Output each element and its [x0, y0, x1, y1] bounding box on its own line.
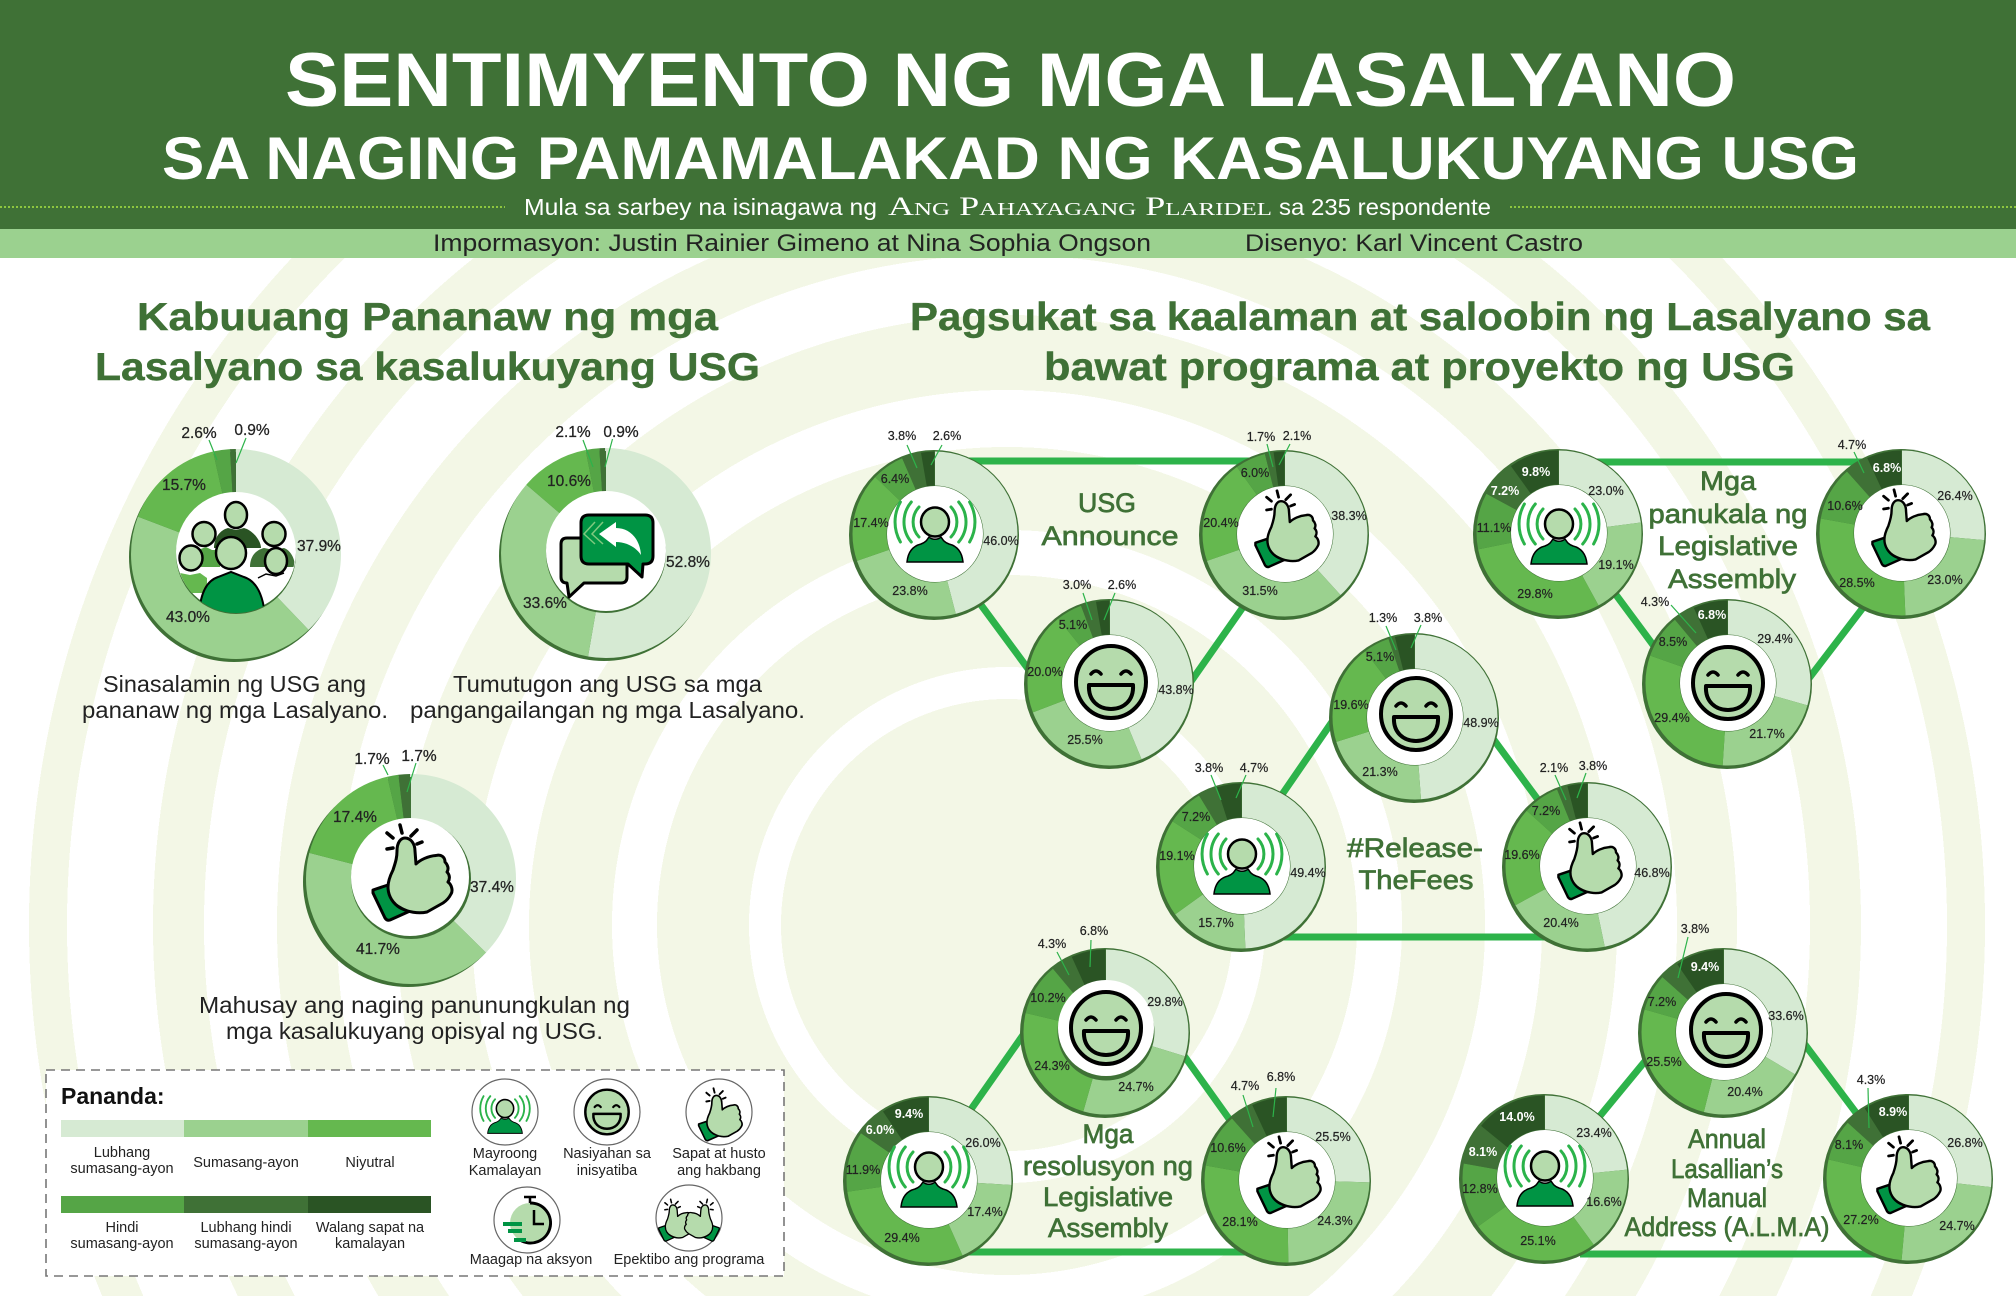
caption: Mahusay — [199, 992, 630, 1044]
donut: resolusyon satisfied: 24.7% — [1118, 1080, 1154, 1094]
label: Release the Fees — [1347, 833, 1483, 895]
label: resolusyon: Assembly — [1048, 1213, 1169, 1243]
donut: panukala satisfied: 29.4% — [1757, 632, 1793, 646]
label: panukala: Legislative — [1658, 531, 1798, 561]
donut: resolusyon satisfied: 29.8% — [1147, 995, 1183, 1009]
icon: thumb — [1255, 491, 1319, 567]
donut: USG Announce awareness: 2.6% — [933, 429, 961, 443]
icon: person — [1519, 504, 1599, 564]
legend colour labels: Sumasang-ayon — [193, 1155, 299, 1171]
icon: thumb — [1877, 1137, 1941, 1213]
legend colour labels: Lubhang — [94, 1145, 150, 1161]
legend panel: Pananda: — [61, 1083, 165, 1109]
donut: resolusyon satisfied: 24.3% — [1034, 1059, 1070, 1073]
heading: right — [910, 296, 1930, 389]
heading: right: bawat programa at proyekto ng USG — [1044, 346, 1795, 389]
donut: ALMA sufficient: 24.7% — [1939, 1219, 1975, 1233]
donut: Release the Fees sufficient — [1502, 759, 1672, 952]
connector triangle: resolusyon — [960, 1018, 1260, 1252]
donut: resolusyon satisfied — [1020, 924, 1190, 1118]
donut: panukala satisfied: 6.8% — [1698, 608, 1726, 622]
icon: smile — [1693, 647, 1763, 719]
legend colour labels — [70, 1145, 425, 1252]
donut: Release the Fees satisfied: 3.8% — [1414, 611, 1442, 625]
label: resolusyon: resolusyon ng — [1023, 1151, 1193, 1181]
connector triangle: USG Announce — [960, 461, 1260, 690]
donut: panukala awareness: 7.2% — [1491, 484, 1519, 498]
legend icon: awareness — [469, 1079, 541, 1179]
donut: resolusyon satisfied: 4.3% — [1038, 937, 1066, 951]
label: panukala: Assembly — [1668, 564, 1797, 594]
donut: ALMA satisfied: 20.4% — [1727, 1085, 1763, 1099]
donut: Release the Fees sufficient: 20.4% — [1543, 916, 1579, 930]
donut: ALMA awareness: 23.4% — [1576, 1126, 1612, 1140]
connector triangle: ALMA — [1580, 1034, 1880, 1254]
donut: Release the Fees sufficient: 19.6% — [1504, 848, 1540, 862]
donut: resolusyon awareness: 17.4% — [967, 1205, 1003, 1219]
caption: Mahusay: Mahusay ang naging panunungkulan ng — [199, 992, 630, 1018]
donut: panukala sufficient: 4.7% — [1838, 438, 1866, 452]
icon: thumb — [1872, 490, 1936, 566]
donut: ALMA awareness: 25.1% — [1520, 1234, 1556, 1248]
donut: ALMA sufficient: 8.9% — [1879, 1105, 1907, 1119]
donut: panukala sufficient: 28.5% — [1839, 576, 1875, 590]
legend icon: sufficient: Sapat at husto — [672, 1146, 766, 1162]
legend colour bars — [61, 1120, 431, 1213]
donut: ALMA awareness: 14.0% — [1499, 1110, 1535, 1124]
donut: USG Announce awareness — [849, 429, 1019, 620]
donut: Sinasalamin ng USG — [129, 422, 341, 662]
donut: ALMA awareness: 12.8% — [1462, 1182, 1498, 1196]
donut: resolusyon awareness: 29.4% — [884, 1231, 920, 1245]
donut: resolusyon sufficient: 4.7% — [1231, 1079, 1259, 1093]
donut: ALMA awareness: 8.1% — [1469, 1145, 1497, 1159]
donut: ALMA awareness — [1459, 1094, 1629, 1264]
caption: Sinasalamin: pananaw ng mga Lasalyano. — [82, 697, 388, 723]
donut: ALMA sufficient: 26.8% — [1947, 1136, 1983, 1150]
donut: USG Announce sufficient: 38.3% — [1331, 509, 1367, 523]
donut: USG Announce satisfied: 25.5% — [1067, 733, 1103, 747]
donut: panukala satisfied: 29.4% — [1654, 711, 1690, 725]
donut: panukala awareness: 11.1% — [1477, 521, 1511, 535]
donut: panukala satisfied: 4.3% — [1641, 595, 1669, 609]
donut: Mahusay ang panunungkulan: 37.4% — [470, 879, 514, 896]
donut: resolusyon awareness: 9.4% — [895, 1107, 923, 1121]
title: SA NAGING PAMAMALAKAD NG KASALUKUYANG USG — [162, 125, 1859, 192]
donut: panukala satisfied — [1641, 595, 1812, 769]
subtitle line: Ang Pahayagang Plaridel — [888, 192, 1272, 221]
credits: Impormasyon: Justin Rainier Gimeno at Nina Sophia Ongson — [433, 230, 1151, 257]
legend colour labels: Niyutral — [345, 1155, 395, 1171]
donut: Mahusay ang panunungkulan — [303, 748, 514, 987]
donut: panukala sufficient: 26.4% — [1937, 489, 1973, 503]
legend icon: timely — [470, 1187, 592, 1268]
donut: ALMA sufficient: 4.3% — [1857, 1073, 1885, 1087]
donut: USG Announce awareness: 23.8% — [892, 584, 928, 598]
label: resolusyon — [1023, 1119, 1193, 1243]
donut: ALMA sufficient — [1823, 1073, 1993, 1264]
donut: ALMA awareness: 16.6% — [1586, 1195, 1622, 1209]
donut: Sinasalamin ng USG: 37.9% — [297, 538, 341, 555]
caption: Sinasalamin — [82, 671, 388, 723]
donut: Release the Fees awareness: 7.2% — [1182, 810, 1210, 824]
donut: USG Announce satisfied: 2.6% — [1108, 578, 1136, 592]
donut: ALMA satisfied: 25.5% — [1646, 1055, 1682, 1069]
legend colour labels: sumasang-ayon — [70, 1161, 174, 1177]
donut: resolusyon sufficient: 24.3% — [1317, 1214, 1353, 1228]
legend panel — [46, 1070, 784, 1276]
donut: USG Announce sufficient: 20.4% — [1203, 516, 1239, 530]
donut: ALMA sufficient: 27.2% — [1843, 1213, 1879, 1227]
legend icon: effective: Epektibo ang programa — [614, 1252, 765, 1268]
donut: USG Announce satisfied: 5.1% — [1059, 618, 1087, 632]
donut: resolusyon awareness: 26.0% — [965, 1136, 1001, 1150]
donut: USG Announce awareness: 17.4% — [853, 516, 889, 530]
donut: Release the Fees awareness: 19.1% — [1159, 849, 1195, 863]
donut: Release the Fees sufficient: 46.8% — [1634, 866, 1670, 880]
donut: USG Announce awareness: 46.0% — [983, 534, 1019, 548]
legend icon: awareness: Kamalayan — [469, 1163, 541, 1179]
icon: smile — [1071, 992, 1141, 1064]
icon: smile — [1381, 678, 1451, 750]
donut: Mahusay ang panunungkulan: 1.7% — [401, 748, 437, 765]
donut: resolusyon awareness — [843, 1096, 1013, 1266]
subtitle line — [0, 192, 2016, 221]
donut: Sinasalamin ng USG: 0.9% — [234, 422, 270, 439]
caption: Tumutugon — [410, 671, 805, 723]
label: resolusyon: Legislative — [1043, 1182, 1173, 1212]
icon: smile — [1076, 646, 1146, 718]
icon: crowd — [180, 502, 295, 616]
donut: resolusyon sufficient: 28.1% — [1222, 1215, 1258, 1229]
donut: USG Announce sufficient: 31.5% — [1242, 584, 1278, 598]
donut: Tumutugon ang USG: 0.9% — [603, 424, 639, 441]
donut: Tumutugon ang USG — [499, 424, 710, 661]
title — [162, 38, 1859, 192]
donut: Release the Fees awareness: 4.7% — [1240, 761, 1268, 775]
donut: USG Announce sufficient: 2.1% — [1283, 429, 1311, 443]
donut: Mahusay ang panunungkulan: 41.7% — [356, 941, 400, 958]
connector triangle: Release the Fees — [1270, 703, 1560, 937]
credits — [433, 230, 1583, 257]
donut: Release the Fees satisfied: 1.3% — [1369, 611, 1397, 625]
donut: ALMA satisfied — [1638, 922, 1808, 1118]
label: ALMA — [1624, 1124, 1830, 1242]
legend icon: sufficient: ang hakbang — [677, 1163, 761, 1179]
caption: Sinasalamin: Sinasalamin ng USG ang — [103, 671, 366, 697]
label: resolusyon: Mga — [1082, 1119, 1134, 1149]
donut: resolusyon sufficient — [1201, 1070, 1371, 1266]
legend icon: satisfied: inisyatiba — [577, 1163, 638, 1179]
donut: ALMA satisfied: 9.4% — [1691, 960, 1719, 974]
donut: Release the Fees awareness: 49.4% — [1290, 866, 1326, 880]
donut: panukala sufficient: 23.0% — [1927, 573, 1963, 587]
label: USG Announce: Announce — [1042, 521, 1178, 551]
donut: USG Announce sufficient — [1199, 429, 1369, 620]
donut: Release the Fees satisfied: 19.6% — [1333, 698, 1369, 712]
caption: Tumutugon: pangangailangan ng mga Lasalyano. — [410, 697, 805, 723]
donut: Release the Fees sufficient: 2.1% — [1540, 761, 1568, 775]
label: USG Announce — [1042, 488, 1178, 551]
donut: Release the Fees satisfied — [1329, 611, 1499, 803]
donut: Mahusay ang panunungkulan: 17.4% — [333, 809, 377, 826]
legend colour labels: kamalayan — [335, 1236, 405, 1252]
label: panukala — [1648, 466, 1808, 594]
label: panukala: Mga — [1700, 466, 1757, 496]
legend colour labels: Hindi — [105, 1220, 139, 1236]
label: ALMA: Manual — [1687, 1183, 1767, 1213]
donut: resolusyon awareness: 11.9% — [846, 1163, 880, 1177]
donut: resolusyon sufficient: 10.6% — [1210, 1141, 1246, 1155]
donut: panukala satisfied: 8.5% — [1659, 635, 1687, 649]
caption: Mahusay: mga kasalukuyang opisyal ng USG. — [226, 1018, 603, 1044]
donut: panukala sufficient — [1816, 438, 1986, 619]
label: ALMA: Address (A.L.M.A) — [1624, 1212, 1830, 1242]
legend icon: awareness: Mayroong — [473, 1146, 537, 1162]
legend colour labels: sumasang-ayon — [194, 1236, 298, 1252]
caption: Tumutugon: Tumutugon ang USG sa mga — [453, 671, 762, 697]
icon: person — [1202, 834, 1282, 894]
donut: resolusyon sufficient: 6.8% — [1267, 1070, 1295, 1084]
subtitle line: Mula sa sarbey na isinagawa ng — [524, 194, 877, 220]
donut: panukala awareness — [1473, 449, 1643, 619]
icon: chat bubbles — [561, 515, 653, 597]
label: ALMA: Annual — [1688, 1124, 1766, 1154]
donut: resolusyon awareness: 6.0% — [866, 1123, 894, 1137]
label: Release the Fees: #Release- — [1347, 833, 1483, 863]
donut: panukala awareness: 9.8% — [1522, 465, 1550, 479]
donut: resolusyon satisfied: 10.2% — [1030, 991, 1066, 1005]
donut: Sinasalamin ng USG: 43.0% — [166, 609, 210, 626]
donut: resolusyon satisfied: 6.8% — [1080, 924, 1108, 938]
donut: USG Announce satisfied — [1024, 578, 1194, 769]
donut: panukala sufficient: 10.6% — [1827, 499, 1863, 513]
legend icon: satisfied — [563, 1079, 652, 1179]
label: USG Announce: USG — [1078, 488, 1136, 518]
donut: panukala awareness: 29.8% — [1517, 587, 1553, 601]
donut: Tumutugon ang USG: 33.6% — [523, 595, 567, 612]
donut: panukala awareness: 19.1% — [1598, 558, 1634, 572]
label: ALMA: Lasallian’s — [1671, 1154, 1783, 1184]
icon: smile — [1691, 994, 1761, 1066]
donut: Tumutugon ang USG: 52.8% — [666, 554, 710, 571]
legend colour labels: Lubhang hindi — [200, 1220, 292, 1236]
donut: Release the Fees awareness: 15.7% — [1198, 916, 1234, 930]
donut: USG Announce satisfied: 43.8% — [1158, 683, 1194, 697]
donut: Mahusay ang panunungkulan: 1.7% — [354, 751, 390, 768]
legend colour labels: Walang sapat na — [316, 1220, 425, 1236]
credits: Disenyo: Karl Vincent Castro — [1245, 230, 1583, 257]
donut: ALMA satisfied: 3.8% — [1681, 922, 1709, 936]
donut: Release the Fees satisfied: 48.9% — [1463, 716, 1499, 730]
donut: Sinasalamin ng USG: 15.7% — [162, 477, 206, 494]
heading: left: Lasalyano sa kasalukuyang USG — [95, 346, 760, 389]
legend icon: sufficient — [672, 1079, 766, 1179]
label: Release the Fees: TheFees — [1358, 865, 1474, 895]
donut: Tumutugon ang USG: 2.1% — [555, 424, 591, 441]
title: SENTIMYENTO NG MGA LASALYANO — [285, 38, 1736, 123]
legend colour labels: sumasang-ayon — [70, 1236, 174, 1252]
donut: USG Announce awareness: 6.4% — [881, 472, 909, 486]
label: panukala: panukala ng — [1648, 499, 1808, 529]
donut: ALMA satisfied: 33.6% — [1768, 1009, 1804, 1023]
donut: Sinasalamin ng USG: 2.6% — [181, 425, 217, 442]
donut: USG Announce sufficient: 1.7% — [1247, 430, 1275, 444]
legend icon: effective — [614, 1185, 765, 1268]
donut: resolusyon sufficient: 25.5% — [1315, 1130, 1351, 1144]
donut: ALMA sufficient: 8.1% — [1835, 1138, 1863, 1152]
donut: Release the Fees satisfied: 21.3% — [1362, 765, 1398, 779]
subtitle line: sa 235 respondente — [1279, 194, 1491, 220]
donut: panukala satisfied: 21.7% — [1749, 727, 1785, 741]
legend icon: satisfied: Nasiyahan sa — [563, 1146, 652, 1162]
icon: person — [1505, 1146, 1585, 1206]
icon: thumbs up — [373, 825, 452, 920]
header band — [0, 0, 2016, 258]
donut: panukala awareness: 23.0% — [1588, 484, 1624, 498]
donut: Release the Fees sufficient: 3.8% — [1579, 759, 1607, 773]
donut: panukala sufficient: 6.8% — [1873, 461, 1901, 475]
donut: USG Announce satisfied: 20.0% — [1027, 665, 1063, 679]
donut: Tumutugon ang USG: 10.6% — [547, 473, 591, 490]
legend icon: timely: Maagap na aksyon — [470, 1252, 592, 1268]
icon: thumb — [1558, 823, 1622, 899]
donut: USG Announce satisfied: 3.0% — [1063, 578, 1091, 592]
heading: left: Kabuuang Pananaw ng mga — [137, 296, 718, 339]
icon: thumb — [1257, 1137, 1321, 1213]
connector triangle: panukala — [1590, 462, 1875, 690]
donut: USG Announce awareness: 3.8% — [888, 429, 916, 443]
donut: Release the Fees satisfied: 5.1% — [1366, 650, 1394, 664]
heading: left — [95, 296, 760, 389]
icon: person — [889, 1147, 969, 1207]
donut: Release the Fees awareness — [1156, 761, 1326, 952]
donut: Release the Fees awareness: 3.8% — [1195, 761, 1223, 775]
donut: ALMA satisfied: 7.2% — [1648, 995, 1676, 1009]
heading: right: Pagsukat sa kaalaman at saloobin ng Lasalyano sa — [910, 296, 1930, 339]
donut: USG Announce sufficient: 6.0% — [1241, 466, 1269, 480]
donut: Release the Fees sufficient: 7.2% — [1532, 804, 1560, 818]
icon: person — [895, 502, 975, 562]
